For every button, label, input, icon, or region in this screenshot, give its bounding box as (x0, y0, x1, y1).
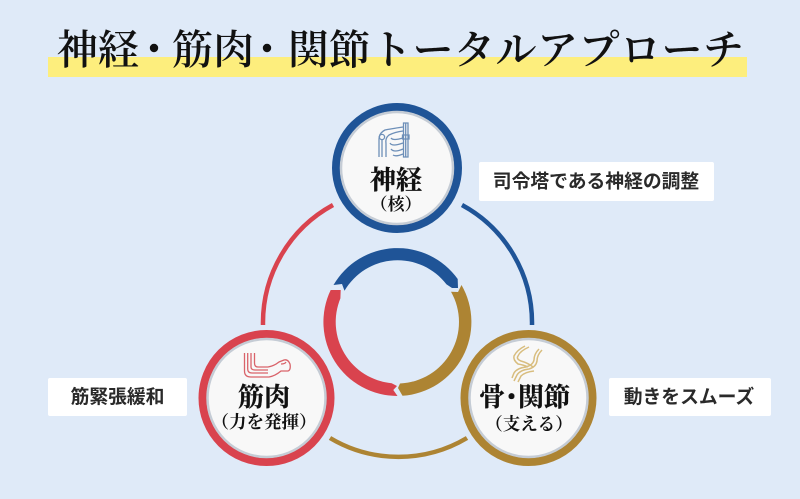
node: muscle (202, 334, 330, 462)
inner cycle arrows (323, 248, 471, 396)
arrow: gold segment (398, 285, 471, 396)
icon: joint (512, 346, 542, 382)
nerve label: 神経 (370, 166, 422, 195)
title: 関節 (288, 27, 370, 73)
muscle label: 筋肉 (238, 383, 290, 412)
callout: joint: 動きをスムーズ (624, 385, 754, 407)
title: トータルアプローチ (371, 27, 744, 73)
callout: nerve: 司令塔である神経の調整 (493, 170, 699, 192)
icon: arm (244, 353, 290, 377)
arc: blue connector (462, 205, 532, 325)
title (57, 27, 744, 73)
arrow: red segment (323, 290, 398, 396)
arc: gold connector (330, 438, 467, 457)
callout: joint (609, 378, 771, 416)
callout: muscle (48, 378, 187, 416)
title: 筋肉 (172, 27, 254, 73)
title highlight bar (48, 57, 747, 77)
node: bone and joint (464, 334, 592, 462)
title: 神経 (57, 27, 139, 73)
callout: muscle: 筋緊張緩和 (71, 386, 164, 407)
callout: nerve (479, 162, 714, 201)
arrow: blue segment (334, 248, 458, 291)
icon: spine and ribs (379, 123, 409, 157)
muscle sublabel: （力を発揮） (212, 412, 316, 432)
arc: red connector (263, 205, 333, 325)
bone and joint sublabel: （支える） (485, 414, 573, 434)
bone and joint label: 骨･関節 (479, 383, 570, 412)
outer connecting ring (263, 205, 532, 457)
nerve sublabel: （核） (370, 195, 422, 214)
node: nerve (336, 107, 458, 229)
